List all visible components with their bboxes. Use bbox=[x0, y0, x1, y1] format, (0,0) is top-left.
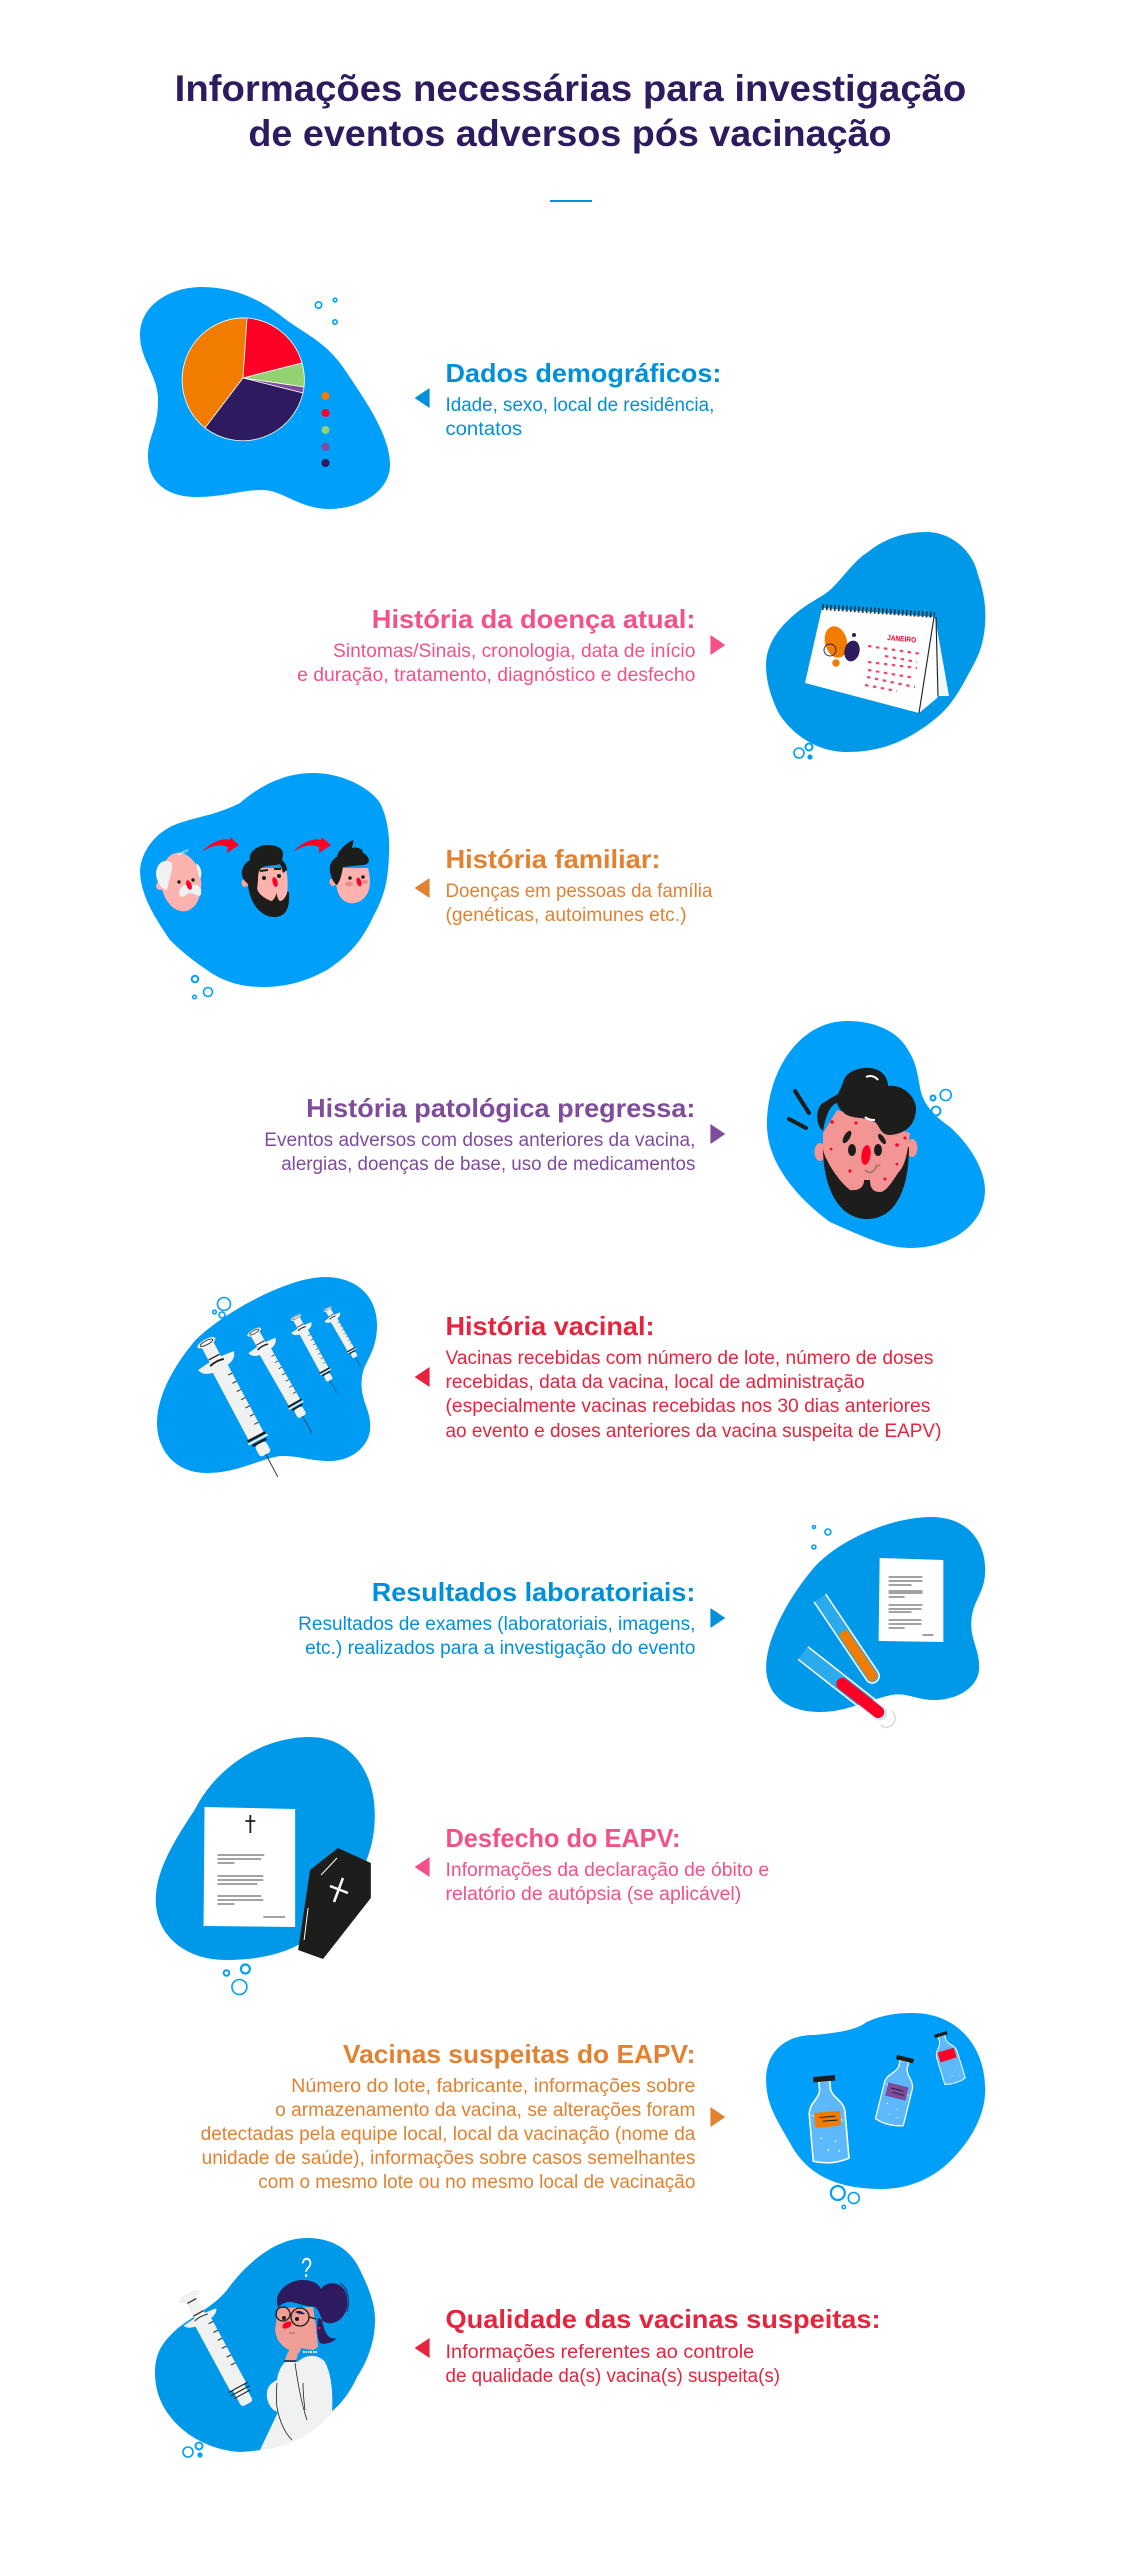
arrow bbox=[710, 2107, 725, 2127]
illustration: death record bbox=[156, 1737, 375, 1994]
arrow bbox=[415, 2338, 430, 2358]
icon: syringe small bbox=[285, 1310, 347, 1398]
text: vacinas suspeitas: com o mesmo lote ou no mesmo local de vacinação bbox=[258, 2172, 695, 2193]
illustration: suspect vials bbox=[766, 2013, 985, 2209]
icon: arrow red 2 bbox=[293, 837, 331, 853]
title divider bbox=[550, 200, 592, 202]
panel: história vacinal bbox=[157, 1277, 941, 1486]
icon: question mark: ? bbox=[301, 2252, 312, 2283]
text: vacinal: História vacinal: bbox=[446, 1311, 654, 1341]
text: desfecho: Desfecho do EAPV: bbox=[446, 1823, 680, 1853]
text: família bbox=[446, 844, 713, 926]
icon: syringe bbox=[171, 2285, 263, 2413]
text: doença atual: e duração, tratamento, diagnóstico e desfecho bbox=[297, 665, 695, 686]
text: laboratoriais: Resultados de exames (laboratoriais, imagens, bbox=[298, 1614, 695, 1635]
icon: child face bbox=[330, 840, 370, 903]
panel: desfecho do EAPV bbox=[156, 1737, 769, 1994]
text: dados demográficos bbox=[446, 358, 721, 440]
text: vacinas suspeitas: unidade de saúde), informações sobre casos semelhantes bbox=[202, 2148, 695, 2169]
text: doença atual bbox=[297, 604, 695, 686]
text: família: (genéticas, autoimunes etc.) bbox=[446, 905, 686, 926]
arrow bbox=[415, 388, 430, 408]
icon: small vial bbox=[930, 2030, 966, 2086]
text: vacinas suspeitas bbox=[201, 2039, 696, 2193]
text: família: Doenças em pessoas da família bbox=[446, 881, 713, 902]
icon: syringe tiny bbox=[319, 1303, 369, 1371]
text: laboratoriais: etc.) realizados para a investigação do evento bbox=[305, 1638, 695, 1659]
text: vacinas suspeitas: o armazenamento da vacina, se alterações foram bbox=[275, 2100, 695, 2121]
arrow bbox=[415, 1857, 430, 1877]
text: laboratoriais: Resultados laboratoriais: bbox=[372, 1577, 695, 1607]
text: laboratoriais bbox=[298, 1577, 695, 1659]
blob background bbox=[157, 1277, 377, 1473]
panel: história familiar bbox=[140, 773, 713, 999]
text: vacinal: recebidas, data da vacina, local de administração bbox=[446, 1372, 865, 1393]
text: vacinas suspeitas: Vacinas suspeitas do EAPV: bbox=[343, 2039, 695, 2069]
pie chart bbox=[182, 318, 304, 441]
blob background bbox=[140, 773, 389, 987]
text: vacinas suspeitas: Número do lote, fabricante, informações sobre bbox=[291, 2076, 695, 2097]
text: doença atual: Sintomas/Sinais, cronologia, data de início bbox=[333, 641, 695, 662]
blob background bbox=[766, 2013, 985, 2189]
panel: história da doença atual bbox=[297, 532, 985, 759]
icon: woman thinking bbox=[260, 2280, 348, 2450]
icon: lab report bbox=[879, 1558, 943, 1642]
icon: large vial bbox=[806, 2074, 849, 2164]
text: família: História familiar: bbox=[446, 844, 660, 874]
arrow bbox=[415, 1367, 430, 1387]
blob background bbox=[140, 287, 390, 509]
icon: medium vial bbox=[875, 2054, 919, 2128]
icon: red test tube bbox=[797, 1646, 899, 1731]
arrow bbox=[415, 878, 430, 898]
bubbles bbox=[812, 1526, 831, 1549]
blob background bbox=[766, 1517, 985, 1712]
blob background bbox=[155, 2238, 375, 2452]
bubbles bbox=[794, 744, 812, 759]
text: vacinas suspeitas: detectadas pela equipe local, local da vacinação (nome da bbox=[201, 2124, 696, 2145]
text: vacinal bbox=[446, 1311, 941, 1442]
text: dados demográficos: Idade, sexo, local de residência, bbox=[446, 395, 714, 416]
title: Informações necessárias para investigação bbox=[175, 68, 966, 109]
text: qualidade: de qualidade da(s) vacina(s) suspeita(s) bbox=[446, 2366, 780, 2387]
icon: old man face bbox=[156, 850, 205, 914]
bubbles bbox=[930, 1090, 951, 1116]
text: vacinal: ao evento e doses anteriores da vacina suspeita de EAPV) bbox=[446, 1421, 941, 1442]
pie legend dots bbox=[322, 392, 330, 467]
icon: calendar: JANEIRO bbox=[887, 633, 917, 645]
text: patológica bbox=[264, 1093, 695, 1175]
bubbles bbox=[315, 298, 337, 324]
text: qualidade: Qualidade das vacinas suspeitas: bbox=[446, 2304, 881, 2334]
text: qualidade bbox=[446, 2304, 881, 2387]
text: desfecho: relatório de autópsia (se aplicável) bbox=[446, 1884, 741, 1905]
text: desfecho bbox=[446, 1823, 769, 1905]
icon: face with rash bbox=[789, 1068, 918, 1219]
text: patológica: alergias, doenças de base, uso de medicamentos bbox=[281, 1154, 695, 1175]
panel: história patológica pregressa bbox=[264, 1021, 985, 1248]
arrow bbox=[710, 1124, 725, 1144]
blob background bbox=[156, 1737, 375, 1960]
arrow bbox=[710, 1608, 725, 1628]
bubbles bbox=[192, 976, 212, 999]
icon: bearded man face bbox=[242, 845, 289, 917]
title: de eventos adversos pós vacinação bbox=[248, 113, 892, 154]
panel: resultados laboratoriais bbox=[298, 1517, 985, 1731]
blob background bbox=[767, 1021, 985, 1248]
text: vacinal: Vacinas recebidas com número de lote, número de doses bbox=[446, 1348, 933, 1369]
text: dados demográficos: Dados demográficos: bbox=[446, 358, 721, 388]
panel: qualidade das vacinas suspeitas bbox=[155, 2238, 881, 2457]
text: qualidade: Informações referentes ao controle bbox=[446, 2342, 754, 2363]
bubbles bbox=[831, 2186, 859, 2209]
text: desfecho: Informações da declaração de óbito e bbox=[446, 1860, 769, 1881]
panel: vacinas suspeitas do EAPV bbox=[201, 2013, 985, 2209]
icon: coffin bbox=[298, 1848, 371, 1959]
text: patológica: História patológica pregressa: bbox=[306, 1093, 695, 1123]
text: patológica: Eventos adversos com doses anteriores da vacina, bbox=[264, 1130, 695, 1151]
arrow bbox=[710, 635, 725, 655]
icon: orange test tube bbox=[814, 1594, 882, 1686]
blob background bbox=[766, 532, 985, 752]
text: vacinal: (especialmente vacinas recebidas nos 30 dias anteriores bbox=[446, 1396, 930, 1417]
icon: syringe medium bbox=[239, 1322, 326, 1441]
illustration: lab results bbox=[766, 1517, 985, 1731]
text: doença atual: História da doença atual: bbox=[372, 604, 695, 634]
bubbles bbox=[224, 1964, 250, 1994]
icon: arrow red 1 bbox=[202, 837, 239, 853]
bubbles bbox=[183, 2442, 202, 2457]
panel: dados demográficos bbox=[140, 287, 721, 509]
icon: syringe large bbox=[187, 1330, 296, 1486]
title bbox=[175, 68, 966, 154]
bubbles bbox=[213, 1298, 230, 1318]
icon: death certificate bbox=[204, 1807, 295, 1927]
text: dados demográficos: contatos bbox=[446, 419, 522, 440]
icon: calendar bbox=[805, 607, 949, 713]
